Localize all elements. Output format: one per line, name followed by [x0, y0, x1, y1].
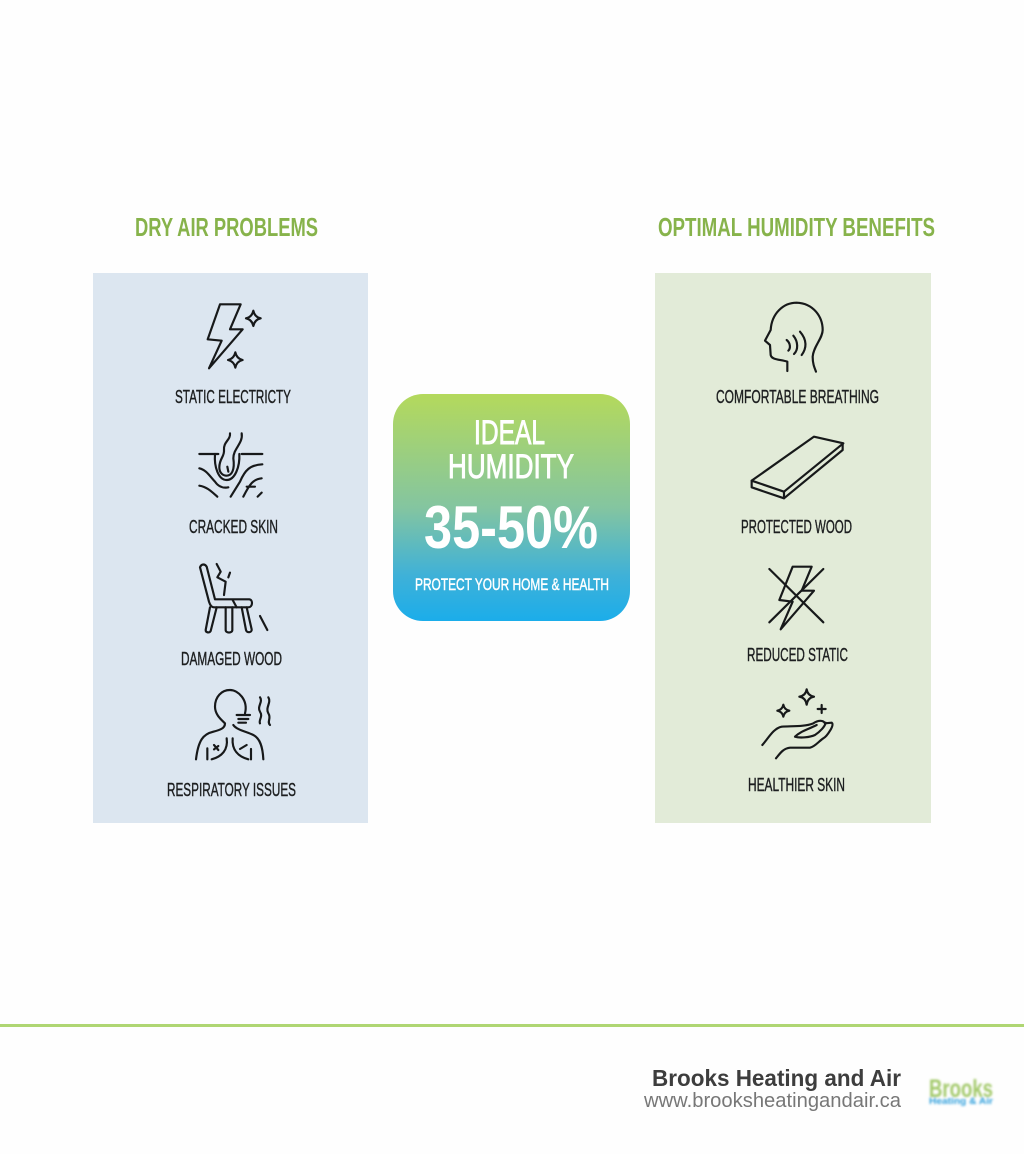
text: ideal: IDEAL	[474, 414, 545, 452]
panel: optimal humidity benefits	[655, 273, 931, 823]
label: damaged wood: DAMAGED WOOD	[181, 649, 282, 669]
logo: brooks: Brooks	[929, 1075, 993, 1103]
icon: damaged wood chair	[200, 564, 267, 632]
stat: 35-50%: 35-50%	[424, 494, 598, 561]
logo: brooks: Heating & Air	[929, 1096, 994, 1106]
footer: company name: Brooks Heating and Air	[652, 1065, 901, 1091]
panel: dry air problems	[93, 273, 368, 823]
text: protect your home and health: PROTECT YOUR HOME & HEALTH	[415, 575, 609, 594]
label: reduced static: REDUCED STATIC	[747, 645, 848, 665]
icon: healthier skin	[762, 689, 832, 758]
label: static electricity: STATIC ELECTRICTY	[175, 387, 291, 407]
icon: protected wood	[752, 437, 843, 498]
icon: respiratory issues	[196, 690, 270, 759]
logo: brooks	[929, 1075, 994, 1106]
icon: reduced static	[769, 567, 823, 629]
footer: website: www.brooksheatingandair.ca	[643, 1090, 902, 1112]
icon: cracked skin	[199, 433, 262, 497]
icon: comfortable breathing	[765, 303, 823, 372]
label: protected wood: PROTECTED WOOD	[741, 517, 852, 537]
label: healthier skin: HEALTHIER SKIN	[748, 775, 845, 795]
text: humidity: HUMIDITY	[448, 448, 574, 486]
label: respiratory issues: RESPIRATORY ISSUES	[167, 780, 296, 800]
panel: ideal humidity callout	[393, 394, 630, 621]
heading: dry air problems: DRY AIR PROBLEMS	[135, 212, 318, 242]
footer rule	[0, 1024, 1024, 1027]
label: cracked skin: CRACKED SKIN	[189, 517, 278, 537]
label: comfortable breathing: COMFORTABLE BREATHING	[716, 387, 879, 407]
icon: static electricity	[208, 304, 261, 368]
